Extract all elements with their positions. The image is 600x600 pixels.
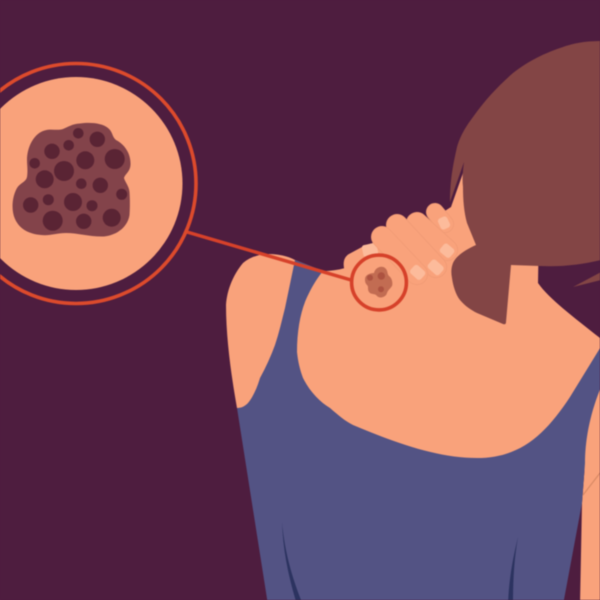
index finger xyxy=(382,237,417,274)
magnified skin xyxy=(0,77,182,290)
thumb nail xyxy=(361,243,379,257)
left dress crease xyxy=(282,522,303,600)
middle finger xyxy=(397,225,436,267)
ring finger xyxy=(417,223,447,250)
magnified view xyxy=(0,64,196,304)
blue tank top xyxy=(237,260,600,600)
right dress crease xyxy=(508,537,518,600)
right arm xyxy=(580,378,600,600)
mole blob xyxy=(365,267,392,297)
thumb xyxy=(344,242,395,285)
connector line xyxy=(187,232,351,280)
finger nails xyxy=(409,215,456,281)
outer ring xyxy=(0,64,196,304)
mole spots xyxy=(23,128,127,231)
hair xyxy=(450,41,600,324)
magnified mole xyxy=(13,123,131,237)
mole spots xyxy=(367,272,385,292)
woman figure xyxy=(226,41,600,600)
hand on neck xyxy=(344,212,456,285)
arm crease xyxy=(583,473,600,495)
hair strand xyxy=(573,270,600,287)
neck mole xyxy=(365,267,392,297)
little finger xyxy=(435,212,445,224)
back and shoulder skin xyxy=(226,170,600,470)
small highlight circle xyxy=(352,255,406,310)
